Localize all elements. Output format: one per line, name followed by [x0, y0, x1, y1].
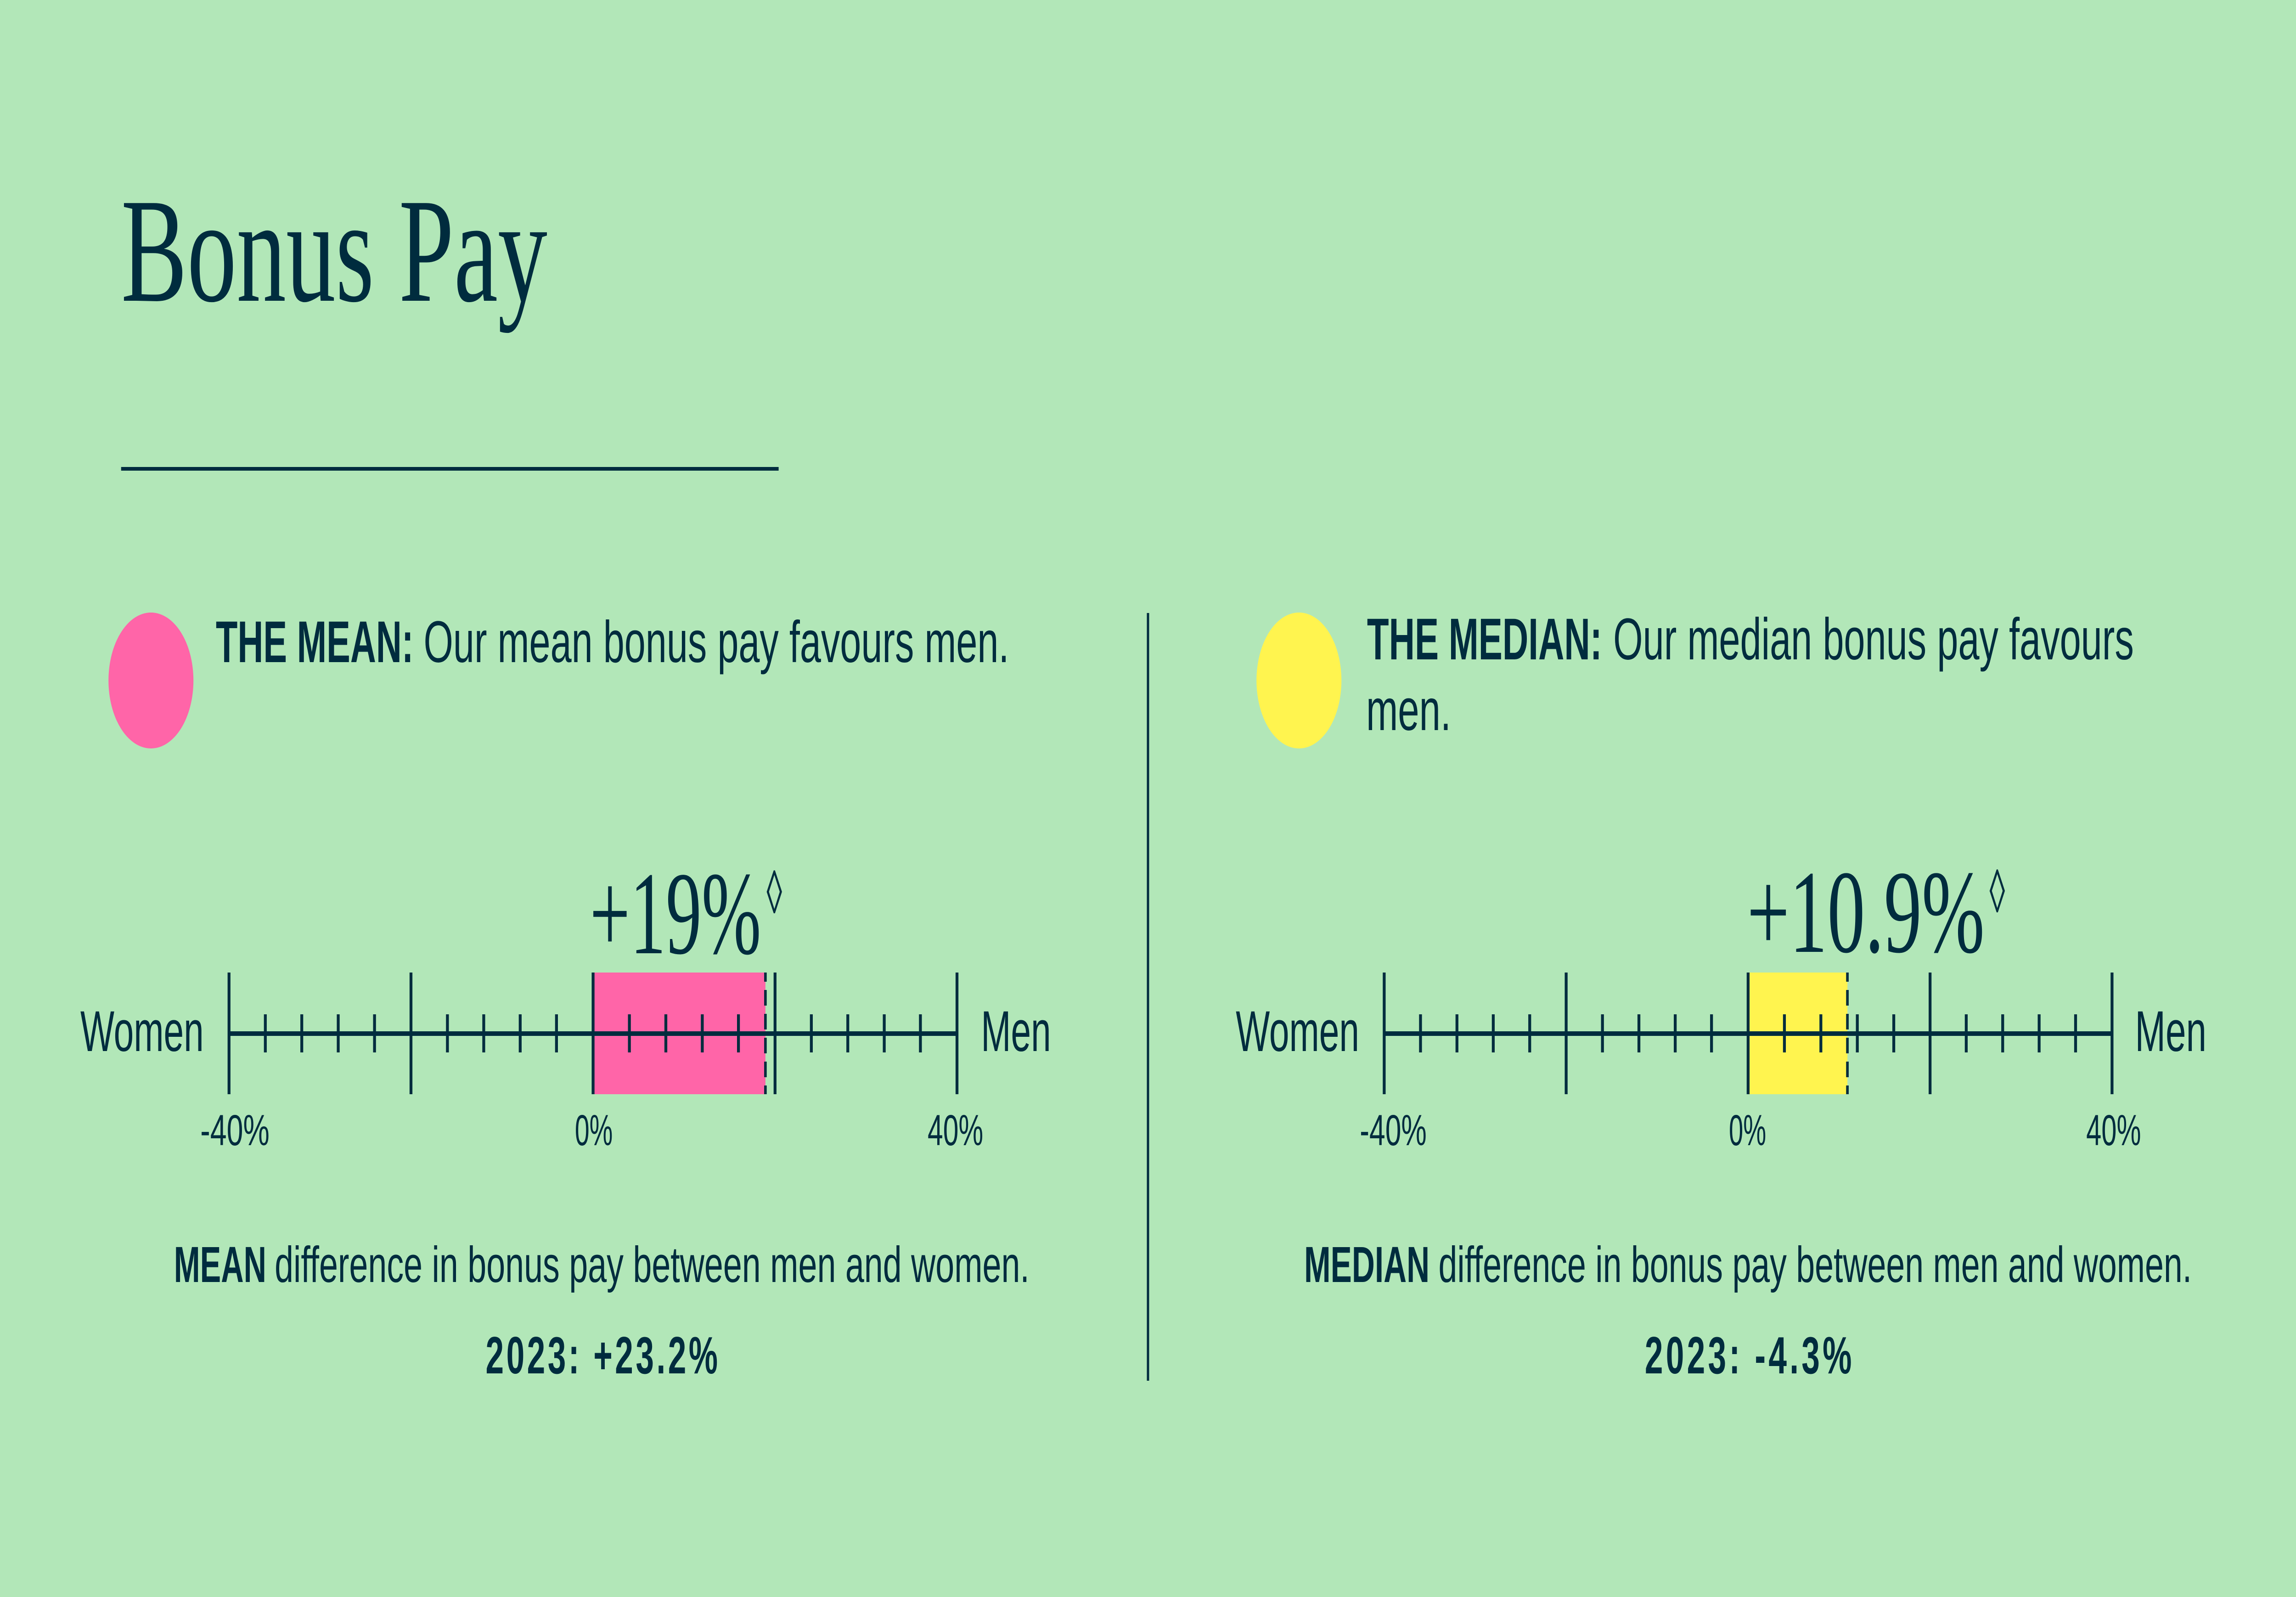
- mean axis labels: [80, 1000, 1051, 1154]
- icon: pink circle: [108, 613, 193, 748]
- median bar: [1748, 973, 1847, 1094]
- title rule: [121, 467, 779, 471]
- mean dashed marker: [763, 973, 767, 1094]
- median description: difference in bonus pay between men and women.: [1438, 1237, 2192, 1293]
- median heading: [1366, 606, 2134, 743]
- mean heading: THE MEAN:: [216, 609, 414, 675]
- median 2023 comparison: 2023: -4.3%: [1645, 1327, 1852, 1385]
- mean value: +19%: [590, 848, 761, 979]
- mean description: MEAN: [174, 1237, 266, 1293]
- mean bar: [593, 973, 765, 1094]
- panel divider: [1147, 613, 1149, 1381]
- mean axis labels: Women: [80, 1000, 204, 1064]
- median heading: men.: [1366, 677, 1451, 743]
- mean axis: [228, 973, 958, 1094]
- median axis labels: 40%: [2086, 1106, 2141, 1154]
- median axis labels: [1236, 1000, 2206, 1154]
- median axis labels: Men: [2135, 1000, 2206, 1064]
- median heading: THE MEDIAN:: [1367, 606, 1602, 672]
- panel: mean: [80, 609, 1051, 1385]
- median value: +10.9%: [1747, 846, 1985, 978]
- mean value: ◊: [766, 859, 782, 927]
- median dashed marker: [1846, 973, 1850, 1094]
- mean heading: Our mean bonus pay favours men.: [423, 609, 1009, 675]
- panel: median: [1236, 606, 2206, 1385]
- mean axis labels: 40%: [928, 1106, 983, 1154]
- median axis labels: -40%: [1360, 1106, 1427, 1154]
- median scale chart: [1383, 973, 2113, 1094]
- median heading: Our median bonus pay favours: [1613, 606, 2134, 672]
- mean scale chart: [228, 973, 958, 1094]
- icon: yellow circle: [1256, 613, 1341, 748]
- title: Bonus Pay: [121, 168, 547, 333]
- mean axis labels: 0%: [575, 1106, 613, 1154]
- mean description: difference in bonus pay between men and women.: [275, 1237, 1030, 1293]
- median axis labels: Women: [1236, 1000, 1359, 1064]
- median description: MEDIAN: [1304, 1237, 1429, 1293]
- median value: ◊: [1989, 858, 2005, 926]
- mean axis labels: -40%: [200, 1106, 270, 1154]
- mean 2023 comparison: 2023: +23.2%: [486, 1327, 718, 1385]
- mean axis labels: Men: [981, 1000, 1051, 1064]
- median axis: [1383, 973, 2113, 1094]
- median axis labels: 0%: [1729, 1106, 1766, 1154]
